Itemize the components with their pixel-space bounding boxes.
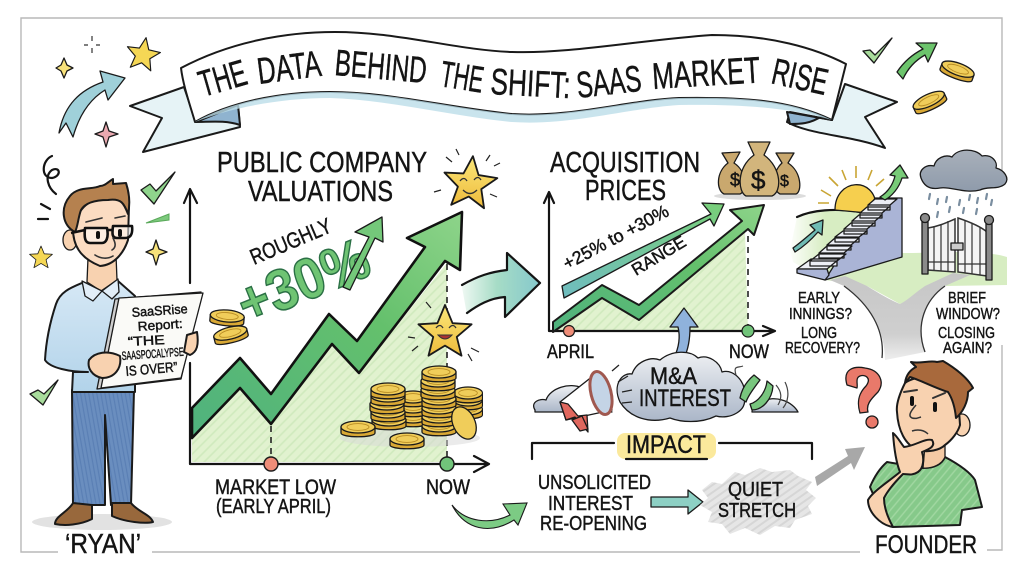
path questions left [785,290,860,357]
x labels: NOW [729,342,769,363]
label: Ryan: ‘RYAN’ [65,528,141,559]
chart heading [550,147,700,207]
chart heading: VALUATIONS [248,176,393,208]
report: SaaSRise [131,301,188,320]
icon: two coins [209,309,249,347]
icon: flying coins [939,58,976,84]
icon: lower check [30,380,58,405]
face [73,197,129,266]
icon: star [30,246,52,268]
label: founder: FOUNDER [875,531,977,559]
report: Report: [137,316,183,334]
squiggle [44,156,59,194]
teal arrow [651,490,703,514]
icon: money bags [714,142,806,200]
shirt [870,457,982,527]
path questions right: AGAIN? [943,340,992,357]
banner left tail [130,87,240,152]
market low dot [264,457,278,471]
icon: yellow sparkle [56,58,73,78]
chart: public company valuations [184,147,500,518]
dashed marker [747,236,749,325]
eyes and mouth [98,231,120,237]
gray scribble [700,468,816,535]
x labels: NOW [426,476,470,499]
rising arrow [192,212,462,438]
callout: roughly +30%: +30% [228,225,379,337]
unsolicited text: RE-OPENING [540,513,647,535]
person: Ryan [32,179,203,559]
shoes [55,503,153,525]
report: “THE [127,332,165,349]
chart heading: PRICES [585,175,666,207]
icon: megaphone [560,365,632,432]
side cloud left [534,386,612,412]
path questions right: CLOSING [938,325,995,342]
icon: teal curved arrow [59,71,125,137]
scene: two paths [785,150,1007,360]
range label: +25% to +30% [559,201,672,274]
main cloud [617,352,745,422]
icon: pink sparkle [95,122,118,147]
cloud text: INTEREST [639,385,731,412]
stair wall [825,198,902,280]
title text [194,42,832,106]
icon: green arrow [897,43,937,79]
title text: MARKET [651,49,761,97]
quiet stretch text: QUIET [728,479,783,501]
x labels [215,476,470,518]
arrow: green step [880,165,908,200]
path questions right: WINDOW? [936,306,1000,323]
x labels: MARKET LOW [215,476,336,499]
title text: THE [194,52,251,105]
collar [82,279,119,301]
thin green arrow [343,217,383,290]
arrow outline [462,253,540,317]
axes [184,189,489,472]
title text: DATA [255,43,324,92]
hand and arm [868,433,933,527]
impact highlight [617,433,716,459]
chart heading: ACQUISITION [550,147,700,179]
ear [63,230,77,250]
chart heading: PUBLIC COMPANY [217,147,427,179]
stair base [797,269,829,280]
banner folds [196,105,832,125]
icon: money bags: $ [730,170,740,190]
unsolicited text: INTEREST [548,493,633,515]
burst ticks [38,204,50,219]
icon: staircase [797,198,902,280]
icon: gate [920,214,994,280]
x labels: (EARLY APRIL) [216,496,331,518]
glasses [71,226,132,243]
path questions left: LONG [801,325,837,342]
path questions right: BRIEF [948,290,986,307]
arrow: blue up [670,308,698,358]
quiet stretch text: STRETCH [718,500,796,522]
hill outline [797,210,860,217]
cloud: M&A interest [534,308,798,432]
banner shade [195,92,832,123]
impact underline and bracket [532,443,812,459]
report [97,292,203,389]
face details [904,390,945,398]
hair [64,179,129,232]
axes [544,192,775,336]
path questions left: INNINGS? [789,306,852,323]
hair [905,361,973,418]
path questions right [936,290,1000,357]
decorations top right [863,38,976,116]
title text: THE [438,53,487,101]
now dot [742,325,754,337]
icon: money bags: $ [751,165,766,195]
face [897,377,960,451]
ear [954,414,970,436]
icon: rain cloud [920,150,1007,191]
title banner [130,32,897,152]
quiet stretch text [718,479,796,522]
path questions left: EARLY [798,290,840,307]
path questions left: RECOVERY? [785,340,860,357]
area under line [553,232,748,331]
title text: SAAS [574,58,643,106]
rain drops [929,194,992,217]
callout: roughly +30%: ROUGHLY [246,213,335,270]
forked road [830,273,970,360]
stair steps [797,199,897,269]
neck [923,440,945,468]
report: SAASPOCALYPSE [121,345,184,363]
area under line [192,263,447,462]
chart heading [217,147,427,208]
unsolicited text: UNSOLICITED [538,472,651,494]
person: founder [846,361,982,559]
banner right tail [787,84,897,148]
gray arrow [815,447,865,486]
icon: dashed sparkle [84,36,100,53]
arrow: teal hill [793,220,823,252]
icon: sun [818,166,884,213]
decorations top left [56,35,163,147]
banner front [181,32,846,122]
icon: green dash [146,214,169,223]
x labels: APRIL [547,342,594,363]
chart: acquisition prices [544,142,806,363]
icon: question mark [846,367,881,428]
icon: sparkle [146,240,167,265]
icon: smiling star lower [408,302,479,361]
jeans [72,390,134,505]
icon: phone [735,366,788,410]
now dot [440,457,454,471]
road edges [844,286,945,358]
title text: BEHIND [333,42,429,91]
icon: money bags: $ [780,173,789,190]
icon: green check [863,38,892,63]
april dot [564,326,574,336]
side cloud right [752,399,798,412]
neck [87,255,117,291]
ground shadow [32,514,172,530]
title text: SHIFT: [490,61,572,106]
unsolicited text [538,472,651,535]
coin stacks [340,366,482,449]
shirt [45,281,135,392]
dashed markers [271,264,447,458]
impact label: IMPACT [626,431,706,459]
decorations around Ryan [30,156,175,405]
title text: RISE [768,51,832,103]
icon: smiling star top [434,149,500,209]
arrow: teal connector [462,253,540,317]
range word: RANGE [628,232,689,279]
icon: gold star [124,35,163,72]
cloud text: M&A [650,363,697,390]
price arrow [553,205,764,332]
hands [89,332,198,378]
left hill [790,210,1007,304]
report: IS OVER” [125,358,178,379]
arrow fill [462,253,540,317]
cloud text [639,363,731,412]
range arrow upper [562,203,724,298]
green return arrow [452,503,527,528]
x labels [547,342,769,363]
section: impact [452,431,865,535]
icon: check [141,172,175,204]
